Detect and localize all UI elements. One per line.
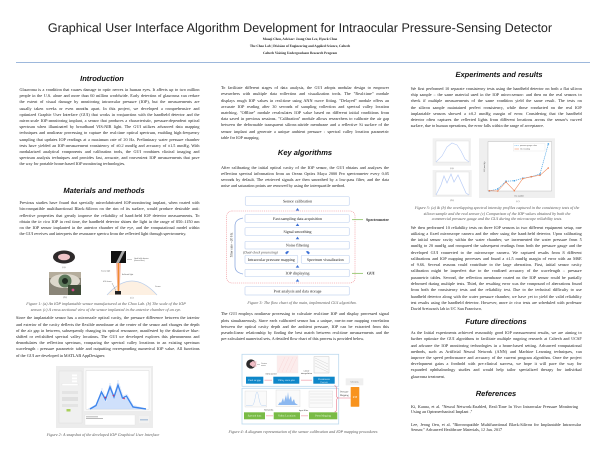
panel labels: (b) bbox=[450, 199, 454, 202]
pressure mapping label: Pressure bbox=[340, 390, 348, 393]
text: reliability tests: the initial sensor cavity within the water chamber, we incremented the water pressure from 5 bbox=[411, 237, 582, 242]
calibration panel bbox=[242, 354, 339, 386]
caption: figure 4: Figure 4: A diagram representation of the sensor calibration and IOP mapping procedures bbox=[229, 429, 377, 434]
flow box labels: Post analysis and data storage bbox=[274, 288, 322, 293]
text: key algorithms: seconds by default. The retrieved signals are then smoothed by a low-pass filter, and the data bbox=[221, 177, 389, 182]
calibration panel: Curves bbox=[320, 381, 328, 384]
panel labels: (b) bbox=[63, 296, 67, 299]
text: future directions: development gains a foothold with pre-clinical success, we hope it will pave the way for bbox=[411, 361, 582, 366]
authors and affiliation: Muaqi Chen, Advisor: Jeong Oen Lee, Hyuck Choo bbox=[263, 37, 337, 41]
left control panel bbox=[59, 371, 82, 423]
text: modular design bbox=[221, 85, 389, 140]
text: materials and methods: on the IOP sensor implanted in the anterior chamber of the eye, and the computational model within bbox=[20, 225, 200, 230]
hardware arrows bbox=[352, 220, 363, 273]
plot c: GUI reading bbox=[520, 148, 530, 151]
text: reliability tests: deformed during multiple tests. Third, the resulting error was the compound of aberrations found bbox=[411, 281, 582, 286]
text: experiments: We first performed 10 separate consistency tests using the handheld detector on both a flat silicon bbox=[411, 86, 582, 91]
text: modular design: researchers with multiple data collection and visualization tools. The "Real-time" module bbox=[221, 91, 389, 96]
orange IOP box: IOP bbox=[353, 396, 358, 399]
calibration panel: sensor bbox=[261, 365, 266, 367]
text: nonlinear processing: between the optical cavity depth and the ambient pressure, IOP can be extracted from this bbox=[221, 324, 389, 329]
panel labels: (c) bbox=[131, 296, 134, 300]
bracket into IOP bbox=[334, 386, 338, 412]
text: reliability tests: calibration might be imperfect due to the confined accuracy of the wavelength – pressure bbox=[411, 268, 582, 273]
figure 1: implant sensor photos and cross-section bbox=[49, 250, 161, 300]
figure 3: algorithm flow chart bbox=[226, 196, 389, 296]
mapping panel bbox=[242, 388, 339, 424]
text: experiments: implantable sensors showed a ±0.2 mmHg margin of error. Considering that the handheld bbox=[411, 111, 582, 116]
text: experiments: surface, due to human operations, the error falls within the range of acceptance. bbox=[411, 123, 544, 128]
caption: figure 1: sensor. (c) A cross-sectional view of the sensor implanted in the anterior chamber of an eye. bbox=[31, 307, 181, 312]
mapping panel: Valley Locations bbox=[278, 415, 296, 418]
text: future directions: further optimize the GUI algorithms to facilitate multiple ongoing research at Caltech and UCSF bbox=[411, 336, 582, 341]
text: modular design: displays rough IOP values in real-time using ANN curve fitting. "Delayed" module offers an bbox=[221, 98, 389, 103]
flow box labels: Sensor calibration bbox=[283, 198, 312, 203]
text: future directions bbox=[410, 330, 582, 379]
mapping panel: Press Mapping bbox=[315, 415, 331, 418]
heading: references: References bbox=[476, 389, 516, 398]
text: modular design: accurate IOP reading after 30 seconds of sampling collection and spectral valley location bbox=[221, 104, 389, 109]
dual-clock note: (Dual-clock processing) bbox=[243, 250, 278, 254]
panel labels: (c) bbox=[517, 200, 520, 203]
text: introduction: spectrum when illuminated by broadband VIS-NIR light. The GUI utilizes advanced data mapping bbox=[20, 124, 200, 129]
mapping panel: Spectral data bbox=[248, 415, 262, 418]
text: materials and methods: Previous studies have found that specially microfabricated IOP-monitoring implant, when coated with bbox=[20, 200, 200, 205]
calibration panel: interpolation bbox=[301, 372, 313, 375]
text: future directions: methods, such as Artificial Neural Network (ANN) and Machine Learning techniques, can bbox=[411, 349, 582, 354]
reference 1 bbox=[411, 404, 578, 414]
text: materials and methods: bio-compatible multifunctional Black-Silicon on the rim of its surface, would produce desirable anti- bbox=[20, 206, 200, 211]
text: introduction: the way for portable home-based IOP monitoring technologies. bbox=[20, 161, 125, 166]
title: Graphical User Interface Algorithm Development for Intraocular Pressure-Sensing Detector bbox=[48, 21, 552, 35]
reference 1: Ki, Kanna, et al. "Neural Network-Enabled, Real-Time In Vivo Intraocular Pressure Monitoring bbox=[411, 404, 578, 408]
authors and affiliation bbox=[250, 37, 350, 55]
text: reliability tests: test results using the handheld detector. However, more in vivo tests are scheduled with professor bbox=[411, 300, 582, 305]
text: nonlinear processing: plots simultaneously. Since each calibrated sensor has a unique, one-to-one mapping correlation bbox=[221, 318, 389, 323]
text: sensor working principle: of the air gap in between, subsequently changing its optical resonance, manifested by the distinctive blue- bbox=[16, 328, 200, 333]
diagram: cross-sectional view: Reflected light bbox=[122, 273, 134, 276]
text: modular design: sensor implant and generate a unique ambient pressure - spectral valley location parametric bbox=[221, 129, 389, 134]
diagram: cross-sectional view: IOP Sensor bbox=[103, 280, 112, 283]
figure 5: consistency and reliability plots bbox=[432, 138, 555, 203]
dashed real-time loop frame bbox=[227, 211, 355, 283]
text: nonlinear processing bbox=[221, 311, 389, 341]
text: materials and methods: the GUI receives and interprets the resonance spectra from the reflected light through spectrometry. bbox=[20, 231, 186, 236]
panel labels: (a) bbox=[63, 266, 66, 269]
heading: key algorithms: Key algorithms bbox=[278, 148, 332, 157]
text: experiments: chip sample – the same material used in the IOP micro-sensor- and then on the real sensors to bbox=[411, 92, 582, 97]
text: modular design: matching. "Offline" module recalculates IOP value based on different initial conditions from bbox=[221, 110, 389, 115]
calibration panel: Linear bbox=[304, 370, 310, 373]
text: reliability tests: calibrations and IOP mapping processes and found a ±1.5 mmHg margin of error with an MSE bbox=[411, 256, 582, 261]
diagram: cross-sectional view: Source light bbox=[101, 270, 111, 272]
calibration panel: Mesh model bbox=[266, 372, 277, 375]
caption: figure 5 bbox=[414, 205, 580, 221]
text: nonlinear processing: pre-calculated numerical sets. A detailed flow chart of this process is provided below. bbox=[221, 336, 364, 341]
text: introduction: Glaucoma is a condition that causes damage to optic nerves in human eyes. It affects up to two million bbox=[20, 87, 200, 92]
authors and affiliation: The Choo Lab | Division of Engineering and Applied Science, Caltech bbox=[250, 44, 350, 48]
plot b bbox=[433, 170, 472, 197]
text: reliability tests: from both the consistency tests and the reliability test. Due to the technical difficulty to use bbox=[411, 287, 582, 292]
diagram: cross-sectional view: Hand-held detector bbox=[134, 257, 149, 260]
calibration panel: Find air gap bbox=[248, 379, 262, 382]
spectrum plot bbox=[84, 368, 151, 411]
gray reference box: Subroutine bbox=[350, 381, 359, 384]
caption: figure 5: silicon sample and the real sensor (c) Comparison of the IOP values obtained by both the bbox=[424, 211, 570, 216]
hardware labels bbox=[366, 217, 389, 276]
text: reliability tests: of 9.66. Several reasons could contribute to the large aberration. First, initial sensor cavity bbox=[411, 262, 582, 267]
pressure mapping label bbox=[340, 390, 349, 397]
flow box labels: Spectrum visualization bbox=[307, 257, 344, 262]
text: key algorithms: After calibrating the initial optical cavity of the IOP sensor, the GUI obtains and analyzes the bbox=[221, 165, 389, 170]
text: modular design: To facilitate different stages of data analysis, the GUI adopts modular design to empower bbox=[221, 85, 389, 90]
text: reliability tests: utilizing a fixed microscope camera and the other using the hand-held detector. Upon calibrating bbox=[411, 231, 582, 236]
text: reliability tests: David Sretavan's lab in UC San Francisco. bbox=[411, 306, 482, 311]
text: future directions: improve the speed performance and accuracy of the current program algorithm. Once the project bbox=[411, 355, 582, 360]
text: introduction: the extent of visual damage by monitoring intraocular pressure (IOP), but the measurements are bbox=[20, 99, 200, 104]
text: key algorithms: reflection spectral information from an Ocean Optics Maya 2000 Pro spectrometer every 0.05 bbox=[221, 171, 389, 176]
text: future directions: expanded ophthalmology studies and would help tailor specialized therapy for individual bbox=[411, 367, 582, 372]
text: sensor working principle: Since the implantable sensor has a microscale optical cavity, the pressure difference between the interior bbox=[16, 315, 200, 320]
text: introduction: spectrum analysis techniques and provides fast, accurate, and convenient IOP measurements that pave bbox=[20, 155, 200, 160]
text: sensor working principle: shifted or red-shifted spectral valley locations. The GUI we developed explores this phenomenon and bbox=[16, 334, 200, 339]
photo: sensor on eye bbox=[49, 272, 81, 295]
text: sensor working principle: and exterior of the cavity deflects the flexible membrane at the center of the sensor and changes the depth bbox=[16, 322, 200, 326]
plot c: IOP (mmHg) bbox=[483, 161, 486, 172]
heading: experiments and results: Experiments and results bbox=[455, 70, 543, 79]
text: future directions: and advance the IOP monitoring technologies in a home-based setting. Advanced computational bbox=[411, 343, 582, 348]
plot c: Test number bbox=[514, 195, 524, 198]
flow box labels: IOP displaying bbox=[286, 270, 309, 276]
plot c bbox=[479, 138, 555, 198]
text: introduction: people in the U.S. alone and more than 60 million worldwide. Early detection of glaucoma can reduce bbox=[20, 93, 200, 98]
heading: materials and methods: Materials and methods bbox=[63, 186, 145, 195]
diagram: cross-sectional view: Cornea bbox=[155, 285, 161, 288]
text: introduction: modularized analytical components and calibration tools, the GUI combines clinical imaging and bbox=[20, 149, 200, 154]
flow boxes bbox=[245, 197, 349, 295]
text: introduction: micro-scale IOP-monitoring implant, a sensor that produces a characteristic, pressure-dependent optical bbox=[20, 118, 200, 123]
text: introduction: optimized Graphic User Interface (GUI) that works in conjunction with the handheld detector and the bbox=[20, 112, 200, 117]
text: reliability tests: mmHg to 20 mmHg and compared the subsequent readings from both the pressure gauge and the bbox=[411, 243, 582, 248]
authors and affiliation: Caltech Visiting Undergraduate Research Program bbox=[263, 51, 337, 55]
text: materials and methods: obtain the in vivo IOP in real time, the handheld detector shines the light in the range of 850–1150 nm bbox=[20, 219, 200, 224]
text: materials and methods: reflective properties that greatly improve the reliability of hand-held IOP detector measurements. To bbox=[20, 213, 200, 218]
figure 4: calibration and mapping diagram bbox=[242, 354, 364, 424]
calibration panel: Custom bbox=[261, 362, 267, 365]
text: experiments: detector often captures the reflected lights from different locations across the sensor's curved bbox=[411, 117, 582, 122]
text: sensor working principle: demodulates the reflection spectrum, comparing the spectral valley locations to an existing spectrum bbox=[16, 340, 200, 345]
panel labels: (a) bbox=[451, 167, 454, 170]
caption: figure 5: Figure 5: (a) & (b) the overlapping spectral intensity profiles captured in the consistency tests of the bbox=[415, 205, 579, 210]
text: modular design: between the deformable transparent silicon-nitride membrane and a reflective Si surface of the bbox=[221, 122, 389, 127]
reference 2: Lee, Jeong Oen, et al. "Biocompatible Multifunctional Black-Silicon for Implantable Intraocular bbox=[411, 422, 581, 426]
text: reliability tests: parametric tables. Second, the reflection membrane coated on the IOP sensor could be partially bbox=[411, 275, 582, 280]
hardware labels: Spectrometer bbox=[366, 217, 389, 222]
text: modular design: table for IOP mapping. bbox=[221, 135, 259, 140]
calibration panel: Parameters bbox=[318, 378, 330, 381]
text: introduction: sampling that updates IOP readings at a maximum rate of 20 Hz. Preliminary water pressure chamber bbox=[20, 137, 200, 142]
text: introduction: usually taken weeks or even months apart. In this project, we developed a comprehensive and bbox=[20, 106, 200, 111]
text: nonlinear processing: pseudo-linear relationship by finding the best match between real-time measurements and the bbox=[221, 330, 389, 335]
reference 2 bbox=[411, 422, 581, 432]
caption: figure 1: Figure 1: (a) An IOP implantable sensor manufactured at the Choo Lab. (b) The scale of the IOP bbox=[26, 301, 186, 306]
icon: ring sensor bbox=[53, 250, 75, 264]
text: reliability tests: We then performed 10 reliability tests on three IOP sensors in two different equipment setup, one bbox=[411, 225, 582, 230]
text: introduction bbox=[20, 87, 200, 166]
text: future directions: glaucoma treatment. bbox=[411, 374, 445, 379]
caption: figure 3: Figure 3: The flow chart of the main, implemented GUI algorithm. bbox=[247, 300, 357, 305]
text: introduction: tests have yielded an IOP-measurement consistency of ±0.2 mmHg and accuracy of ±1.5 mmHg. With bbox=[20, 143, 200, 148]
text: key algorithms: noise and saturation points are removed by using the interquartile method. bbox=[221, 183, 345, 188]
caption: figure 5: commercial pressure gauge and the GUI during the microscope reliability tests. bbox=[432, 216, 562, 221]
text: sensor working principle: wavelength - pressure parametric table and outputting corresponding numerical IOP value. All functions bbox=[16, 346, 200, 351]
flow box labels bbox=[248, 198, 344, 293]
flow box labels: Signal smoothing bbox=[283, 229, 312, 234]
text: modular design: data saved in previous sessions. "Calibration" module allows researchers to calibrate the air gap bbox=[221, 116, 389, 121]
text: experiments: the silicon sample maintained perfect consistency, while those conducted on the real IOP bbox=[411, 104, 582, 110]
plot a bbox=[433, 138, 471, 166]
heading: introduction: Introduction bbox=[80, 74, 124, 83]
rate label: filter rate ~20 Hz bbox=[229, 232, 233, 257]
mapping panel: Find peaks bbox=[264, 409, 273, 412]
pressure mapping label: Mapping bbox=[340, 394, 349, 397]
text: reliability tests: handheld detector along with the water pressure chamber, we have yet to yield the valid reliability bbox=[411, 294, 582, 299]
header rule bbox=[16, 62, 590, 63]
caption: figure 2: Figure 2: A snapshot of the developed IOP Graphical User Interface bbox=[47, 432, 159, 437]
text: key algorithms bbox=[221, 165, 389, 188]
text: sensor working principle: of the GUI are developed in MATLAB AppDesigner. bbox=[16, 353, 105, 358]
text: reliability tests bbox=[410, 225, 582, 311]
flow box labels: Intraocular pressure mapping bbox=[248, 257, 295, 262]
panel labels bbox=[63, 266, 134, 300]
text: introduction: techniques and nonlinear processing to capture the real-time optical spectrum, enabling high-frequency bbox=[20, 130, 200, 135]
panel labels bbox=[450, 167, 520, 203]
sampling rate bracket bbox=[235, 218, 243, 274]
flow box labels: Fast-sampling data acquisition bbox=[273, 216, 322, 221]
text: sensor working principle bbox=[16, 315, 200, 358]
reference 1: Using an Optomechanical Implant ." bbox=[411, 408, 472, 414]
figure 2: GUI screenshot bbox=[56, 366, 153, 428]
mapping panel: Input filter bbox=[299, 409, 308, 412]
text: reliability tests: developed GUI connected to the microscope camera. We captured results from 8 different bbox=[411, 250, 582, 255]
calibration panel: Valley trace plot bbox=[278, 379, 295, 382]
text: experiments: check if multiple measurements of the same condition yield the same result. The tests on bbox=[411, 98, 582, 103]
caption: figure 1 bbox=[26, 301, 186, 312]
hardware labels: GUI bbox=[367, 271, 375, 276]
plot c: pressure gauge value bbox=[520, 144, 537, 147]
text: experiments bbox=[410, 86, 582, 128]
text: nonlinear processing: The GUI employs nonlinear processing to calculate real-time IOP and display processed signal bbox=[221, 311, 389, 316]
log box bbox=[85, 415, 149, 425]
reference 2: Sensor." Advanced Healthcare Materials, 12 Jan. 2017 bbox=[411, 426, 502, 432]
diagram: cross-sectional view: (Source fiber) bbox=[134, 259, 145, 262]
diagram: cross-sectional view bbox=[101, 251, 161, 295]
flow box labels: Noise filtering bbox=[286, 243, 309, 248]
heading: future directions: Future directions bbox=[465, 317, 527, 326]
flow arrows bbox=[285, 208, 310, 282]
text: future directions: As the Initial experiments achieved reasonably good IOP measurement results, we are aiming to bbox=[411, 330, 582, 335]
text: materials and methods bbox=[20, 200, 200, 236]
